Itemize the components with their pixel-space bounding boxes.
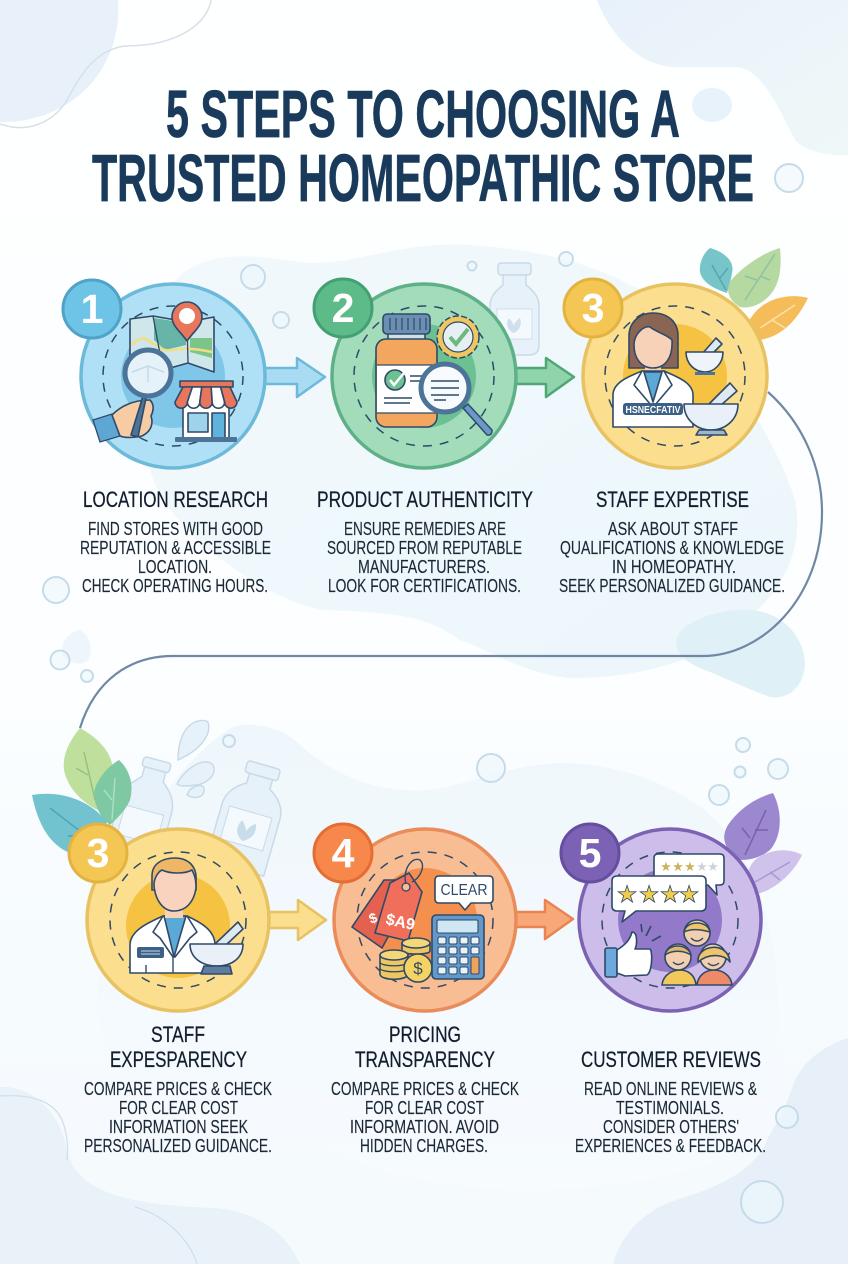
arrow 4: [512, 900, 573, 939]
heading and text 5: CUSTOMER REVIEWS: [581, 1047, 761, 1072]
heading and text lower 3: EXPESPARENCY: [110, 1047, 247, 1072]
circle 4: [334, 829, 516, 1011]
heading and text lower 3: INFORMATION SEEK: [109, 1117, 248, 1137]
heading and text 1: LOCATION RESEARCH: [83, 487, 268, 512]
background bottle upper: [490, 263, 539, 355]
heading and text 4: COMPARE PRICES & CHECK: [331, 1079, 519, 1099]
heading and text 4: FOR CLEAR COST: [365, 1098, 484, 1118]
icon: female pharmacist: HSNECFATIV: [626, 404, 680, 416]
heading and text 2: LOOK FOR CERTIFICATIONS.: [328, 576, 521, 596]
arrow lower 3: [265, 900, 326, 940]
heading and text lower 3: FOR CLEAR COST: [119, 1098, 238, 1118]
badge 3: [564, 279, 622, 337]
icon: review bubbles: ★: [707, 859, 719, 874]
icon: customers: [662, 920, 732, 985]
step 4 pricing transparency: [314, 824, 573, 1156]
icon: review bubbles: ★: [696, 859, 708, 874]
step 1 location research: [63, 280, 325, 596]
heading and text 2: ENSURE REMEDIES ARE: [344, 519, 506, 539]
heading and text lower 3: STAFF: [151, 1022, 205, 1047]
heading and text 5: READ ONLINE REVIEWS &: [584, 1079, 757, 1099]
heading and text 5: TESTIMONIALS.: [616, 1098, 724, 1118]
icon: lower mortar: [190, 922, 243, 974]
icon: review bubbles: ★: [617, 881, 637, 907]
heading and text 4: HIDDEN CHARGES.: [360, 1136, 488, 1156]
icon: review bubbles: ★: [660, 859, 672, 874]
icon: calculator: [432, 915, 484, 979]
icon: coins: [380, 938, 432, 982]
icon: small mortar: [686, 338, 723, 375]
heading and text 5: EXPERIENCES & FEEDBACK.: [575, 1136, 766, 1156]
background bottles and drops lower: [108, 720, 293, 876]
heading and text 5: CONSIDER OTHERS': [603, 1117, 739, 1137]
icon: clear speech bubble: [435, 876, 493, 910]
heading and text lower 3: PERSONALIZED GUIDANCE.: [84, 1136, 272, 1156]
badge 2: 2: [332, 285, 354, 331]
leaves lower left: [32, 728, 132, 853]
heading and text 2: SOURCED FROM REPUTABLE: [327, 538, 522, 558]
icon: certification seal: [437, 316, 479, 358]
badge 4: 4: [332, 830, 355, 876]
badge 2: [314, 279, 372, 337]
circle 3: [583, 284, 767, 468]
circle lower 3: [87, 829, 269, 1011]
icon: review bubbles: ★: [672, 859, 684, 874]
icon: review bubbles: ★: [679, 881, 699, 907]
heading and text 1: REPUTATION & ACCESSIBLE: [80, 538, 271, 558]
icon: clear speech bubble: CLEAR: [440, 882, 488, 899]
badge 1: [63, 280, 121, 338]
icon: male pharmacist: [130, 858, 215, 973]
icon: remedy bottle: [376, 314, 437, 427]
heading and text 3: ASK ABOUT STAFF: [608, 519, 738, 539]
heading and text 3: [559, 487, 785, 596]
icon: map and pin: [130, 302, 214, 372]
step 2 product authenticity: [314, 279, 574, 596]
arrow 1: [262, 358, 325, 397]
icon: thumbs up: [605, 924, 661, 977]
badge 1: 1: [81, 286, 103, 332]
badge lower 3: 3: [87, 830, 109, 876]
icon: female pharmacist: [613, 313, 693, 427]
step 3 staff expertise: [559, 279, 785, 596]
icon: price tags: $: [367, 909, 380, 927]
heading and text 1: FIND STORES WITH GOOD: [88, 519, 263, 539]
circle 2: [332, 284, 516, 468]
heading and text 3: SEEK PERSONALIZED GUIDANCE.: [559, 576, 785, 596]
badge 5: [561, 824, 619, 882]
leaves lower right: [724, 793, 802, 895]
circle 5: [579, 829, 761, 1011]
badge lower 3: [69, 824, 127, 882]
leaves upper right: [700, 248, 808, 340]
heading and text 4: [331, 1022, 519, 1156]
decorative bubbles: [43, 164, 803, 1223]
heading and text lower 3: COMPARE PRICES & CHECK: [84, 1079, 272, 1099]
icon: review bubbles: ★: [660, 881, 680, 907]
badge 5: 5: [579, 830, 601, 876]
heading and text 5: [575, 1047, 766, 1156]
badge 3: 3: [582, 285, 604, 331]
step 5 customer reviews: [561, 824, 766, 1156]
icon: coins: $: [413, 959, 423, 978]
heading and text 1: CHECK OPERATING HOURS.: [82, 576, 268, 596]
icon: review bubbles: ★: [684, 859, 696, 874]
heading and text 3: QUALIFICATIONS & KNOWLEDGE: [560, 538, 784, 558]
icon: large mortar: [684, 383, 738, 435]
icon: review bubbles: [612, 854, 724, 922]
step 3 lower staff transparency: [69, 824, 326, 1156]
heading and text 2: [317, 487, 533, 596]
heading and text lower 3: [84, 1022, 272, 1156]
heading and text 3: IN HOMEOPATHY.: [612, 557, 736, 577]
title: [92, 77, 754, 216]
connector line from upper row to lower row: [80, 392, 822, 728]
heading and text 2: PRODUCT AUTHENTICITY: [317, 487, 533, 512]
heading and text 2: MANUFACTURERS.: [358, 557, 490, 577]
badge 4: [314, 824, 372, 882]
heading and text 4: INFORMATION. AVOID: [350, 1117, 499, 1137]
icon: price tags: [352, 859, 422, 948]
arrow 2: [512, 358, 574, 397]
icon: magnifier: [421, 364, 492, 435]
heading and text 1: LOCATION.: [138, 557, 212, 577]
heading and text 4: TRANSPARENCY: [355, 1047, 495, 1072]
icon: price tags: $A9: [384, 911, 417, 934]
heading and text 3: STAFF EXPERTISE: [596, 487, 749, 512]
circle 1: [81, 284, 265, 468]
icon: magnifier and hand: [93, 350, 171, 442]
heading and text 1: [80, 487, 271, 596]
icon: store: [175, 381, 237, 442]
heading and text 4: PRICING: [389, 1022, 461, 1047]
icon: review bubbles: ★: [639, 881, 659, 907]
